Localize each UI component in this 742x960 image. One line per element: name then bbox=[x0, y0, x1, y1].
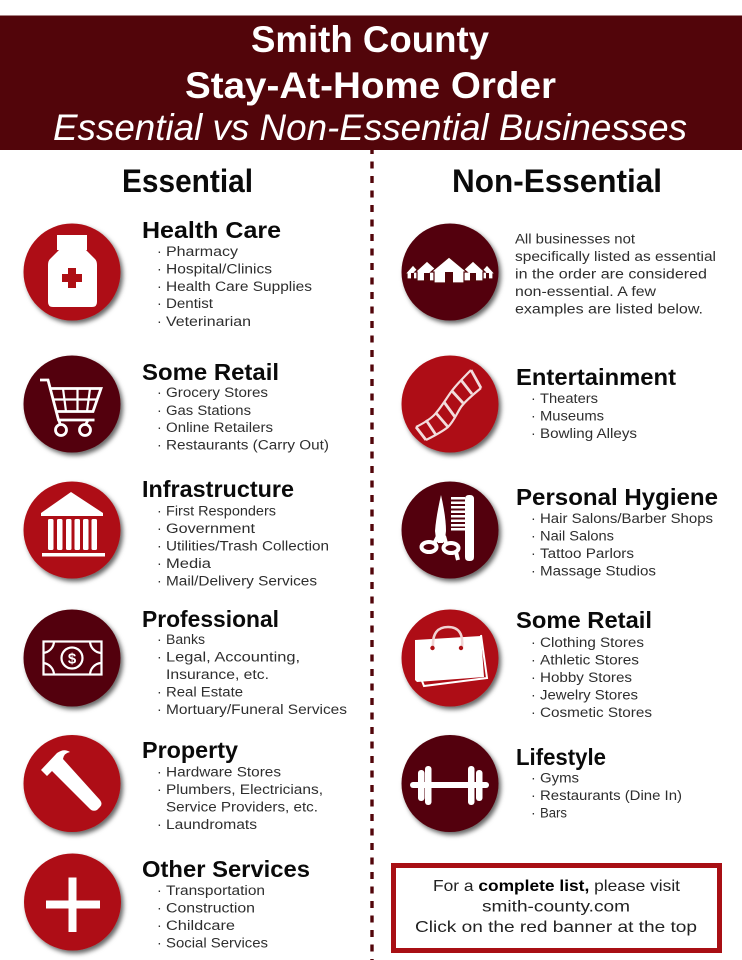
icon: houses bbox=[402, 224, 498, 320]
text: Professional list: · bbox=[157, 650, 162, 666]
text: Personal Hygiene list: · bbox=[531, 564, 536, 580]
text: Entertainment list: · bbox=[531, 426, 536, 442]
section: Some Retail (non-essential) bbox=[402, 607, 652, 721]
text: Other Services list bbox=[142, 856, 310, 952]
text: Lifestyle list bbox=[516, 744, 682, 822]
text: Professional list: Real Estate bbox=[166, 684, 243, 700]
text: Some Retail stores list: Clothing Stores bbox=[540, 635, 644, 651]
heading: Non-Essential: Non-Essential bbox=[452, 163, 662, 199]
text: Infrastructure list: First Responders bbox=[166, 504, 276, 520]
text: Lifestyle list: Gyms bbox=[540, 770, 579, 786]
title banner: Essential vs Non-Essential Businesses bbox=[53, 107, 687, 148]
section: Health Care bbox=[24, 217, 312, 330]
text: Some Retail list: · bbox=[157, 403, 162, 419]
text: Property list: Laundromats bbox=[166, 817, 257, 833]
text: Personal Hygiene list: · bbox=[531, 546, 536, 562]
section: Non-essential intro bbox=[402, 224, 716, 320]
text: Property list: · bbox=[157, 764, 162, 780]
text: Lifestyle list: · bbox=[531, 788, 536, 804]
section: Professional bbox=[24, 606, 347, 718]
text: Lifestyle list: · bbox=[531, 770, 536, 786]
text: Personal Hygiene list: · bbox=[531, 511, 536, 527]
text: Other Services list: Childcare bbox=[166, 918, 235, 934]
icon: medicine bottle bbox=[24, 224, 120, 320]
text: Entertainment list: Bowling Alleys bbox=[540, 426, 637, 442]
text: Personal Hygiene list bbox=[516, 484, 718, 580]
icon: scissors and comb bbox=[402, 482, 498, 578]
text: Entertainment list: · bbox=[531, 408, 536, 424]
text: Professional list bbox=[142, 606, 347, 718]
text: intro paragraph: All businesses not bbox=[515, 232, 635, 248]
text: intro paragraph: specifically listed as essential bbox=[515, 249, 716, 265]
text: Personal Hygiene list: Hair Salons/Barber Shops bbox=[540, 511, 713, 527]
text: Property list: · bbox=[157, 817, 162, 833]
text: Health Care list: · bbox=[157, 314, 162, 330]
text: Some Retail list: · bbox=[157, 385, 162, 401]
icon: shopping cart bbox=[24, 356, 120, 452]
text: Lifestyle list: Bars bbox=[540, 806, 567, 822]
text: Property list: Plumbers, Electricians, bbox=[166, 782, 323, 798]
text: Lifestyle list: Lifestyle bbox=[516, 744, 606, 770]
text: Personal Hygiene list: Tattoo Parlors bbox=[540, 546, 634, 562]
text: Property list bbox=[142, 737, 323, 833]
text: intro paragraph: non-essential. A few bbox=[515, 284, 657, 300]
text: Property list: Property bbox=[142, 737, 238, 763]
text: Some Retail stores list: · bbox=[531, 688, 536, 704]
text: Health Care list: Health Care Supplies bbox=[166, 279, 312, 295]
text: Health Care list: · bbox=[157, 296, 162, 312]
text: Some Retail stores list: Some Retail bbox=[516, 607, 652, 633]
text: Infrastructure list: Media bbox=[166, 556, 211, 572]
text: Professional list: · bbox=[157, 632, 162, 648]
section: Other Services bbox=[24, 854, 310, 952]
text: Health Care list: · bbox=[157, 244, 162, 260]
callout: complete list box: smith-county.com bbox=[482, 898, 630, 916]
text: Other Services list: Other Services bbox=[142, 856, 310, 882]
text: Other Services list: Transportation bbox=[166, 883, 265, 899]
text: Infrastructure list: · bbox=[157, 504, 162, 520]
icon: film strip bbox=[402, 356, 498, 452]
icon: government building bbox=[24, 482, 120, 578]
text: Entertainment list: · bbox=[531, 391, 536, 407]
text: Some Retail list: · bbox=[157, 438, 162, 454]
callout: complete list box bbox=[394, 866, 720, 950]
text: Personal Hygiene list: Massage Studios bbox=[540, 564, 656, 580]
text: Some Retail list: Restaurants (Carry Out) bbox=[166, 438, 329, 454]
section: Infrastructure bbox=[24, 476, 329, 590]
icon: dollar bill bbox=[24, 610, 120, 706]
icon: hammer bbox=[24, 735, 120, 832]
text: Entertainment list: Museums bbox=[540, 408, 604, 424]
text: Some Retail stores list bbox=[516, 607, 652, 721]
text: Infrastructure list: · bbox=[157, 556, 162, 572]
text: Lifestyle list: · bbox=[531, 806, 536, 822]
text: Some Retail list: Some Retail bbox=[142, 359, 279, 385]
icon: shopping bag bbox=[402, 610, 498, 706]
text: Personal Hygiene list: Nail Salons bbox=[540, 528, 614, 544]
title banner: Smith County bbox=[251, 19, 489, 60]
text: Some Retail list: Grocery Stores bbox=[166, 385, 268, 401]
text: Other Services list: Construction bbox=[166, 900, 255, 916]
text: Infrastructure list: · bbox=[157, 538, 162, 554]
text: Personal Hygiene list: Personal Hygiene bbox=[516, 484, 718, 510]
text: Some Retail stores list: Hobby Stores bbox=[540, 670, 632, 686]
text: Infrastructure list: Government bbox=[166, 521, 255, 537]
text: Other Services list: · bbox=[157, 900, 162, 916]
text: Personal Hygiene list: · bbox=[531, 528, 536, 544]
text: Infrastructure list bbox=[142, 476, 329, 590]
text: Some Retail stores list: · bbox=[531, 670, 536, 686]
section: Entertainment bbox=[402, 356, 676, 452]
text: Health Care list: Health Care bbox=[142, 217, 281, 243]
title banner: Stay-At-Home Order bbox=[185, 65, 556, 106]
text: Other Services list: · bbox=[157, 883, 162, 899]
icon: barbell bbox=[402, 735, 498, 832]
text: Health Care list: Veterinarian bbox=[166, 314, 251, 330]
text: Property list: Hardware Stores bbox=[166, 764, 281, 780]
text: Other Services list: · bbox=[157, 936, 162, 952]
text: Some Retail stores list: · bbox=[531, 635, 536, 651]
text: Some Retail stores list: Cosmetic Stores bbox=[540, 705, 652, 721]
title banner bbox=[0, 16, 742, 150]
text: Some Retail stores list: Athletic Stores bbox=[540, 652, 639, 668]
text: intro paragraph: examples are listed below. bbox=[515, 302, 703, 318]
text: Infrastructure list: Utilities/Trash Collection bbox=[166, 538, 329, 554]
text: Professional list: Professional bbox=[142, 606, 279, 632]
text: Health Care list: Hospital/Clinics bbox=[166, 262, 272, 278]
heading: Essential: Essential bbox=[122, 163, 253, 199]
callout: complete list box: For a complete list, please visit bbox=[433, 878, 681, 895]
text: Infrastructure list: Infrastructure bbox=[142, 476, 294, 502]
text: Health Care list: Dentist bbox=[166, 296, 213, 312]
text: Infrastructure list: · bbox=[157, 521, 162, 537]
text: Health Care list bbox=[142, 217, 312, 330]
icon: dollar bill: $ bbox=[68, 650, 77, 668]
section: Property bbox=[24, 735, 323, 833]
text: Some Retail list: · bbox=[157, 420, 162, 436]
icon: plus sign bbox=[24, 854, 121, 950]
text: Some Retail list: Gas Stations bbox=[166, 403, 251, 419]
text: Health Care list: · bbox=[157, 279, 162, 295]
section: Personal Hygiene bbox=[402, 482, 718, 580]
text: intro paragraph: in the order are considered bbox=[515, 266, 707, 282]
text: Entertainment list bbox=[516, 364, 676, 442]
section: Lifestyle bbox=[402, 735, 682, 832]
text: Professional list: Insurance, etc. bbox=[166, 667, 269, 683]
text: Some Retail stores list: · bbox=[531, 652, 536, 668]
text: Professional list: · bbox=[157, 684, 162, 700]
text: Professional list: · bbox=[157, 702, 162, 718]
text: Some Retail stores list: Jewelry Stores bbox=[540, 688, 638, 704]
text: Health Care list: · bbox=[157, 262, 162, 278]
text: Other Services list: · bbox=[157, 918, 162, 934]
text: Some Retail list: Online Retailers bbox=[166, 420, 273, 436]
text: Professional list: Banks bbox=[166, 632, 205, 648]
text: intro paragraph bbox=[515, 232, 716, 318]
text: Property list: Service Providers, etc. bbox=[166, 800, 318, 816]
text: Property list: · bbox=[157, 782, 162, 798]
text: Lifestyle list: Restaurants (Dine In) bbox=[540, 788, 682, 804]
section: Some Retail (essential) bbox=[24, 356, 329, 454]
text: Infrastructure list: Mail/Delivery Services bbox=[166, 574, 317, 590]
text: Other Services list: Social Services bbox=[166, 936, 268, 952]
callout: complete list box: Click on the red banner at the top bbox=[415, 919, 697, 936]
text: Entertainment list: Entertainment bbox=[516, 364, 676, 390]
text: Entertainment list: Theaters bbox=[540, 391, 598, 407]
text: Professional list: Mortuary/Funeral Services bbox=[166, 702, 347, 718]
text: Infrastructure list: · bbox=[157, 574, 162, 590]
text: Some Retail stores list: · bbox=[531, 705, 536, 721]
text: Professional list: Legal, Accounting, bbox=[166, 650, 300, 666]
text: Some Retail list bbox=[142, 359, 329, 454]
text: Health Care list: Pharmacy bbox=[166, 244, 239, 260]
